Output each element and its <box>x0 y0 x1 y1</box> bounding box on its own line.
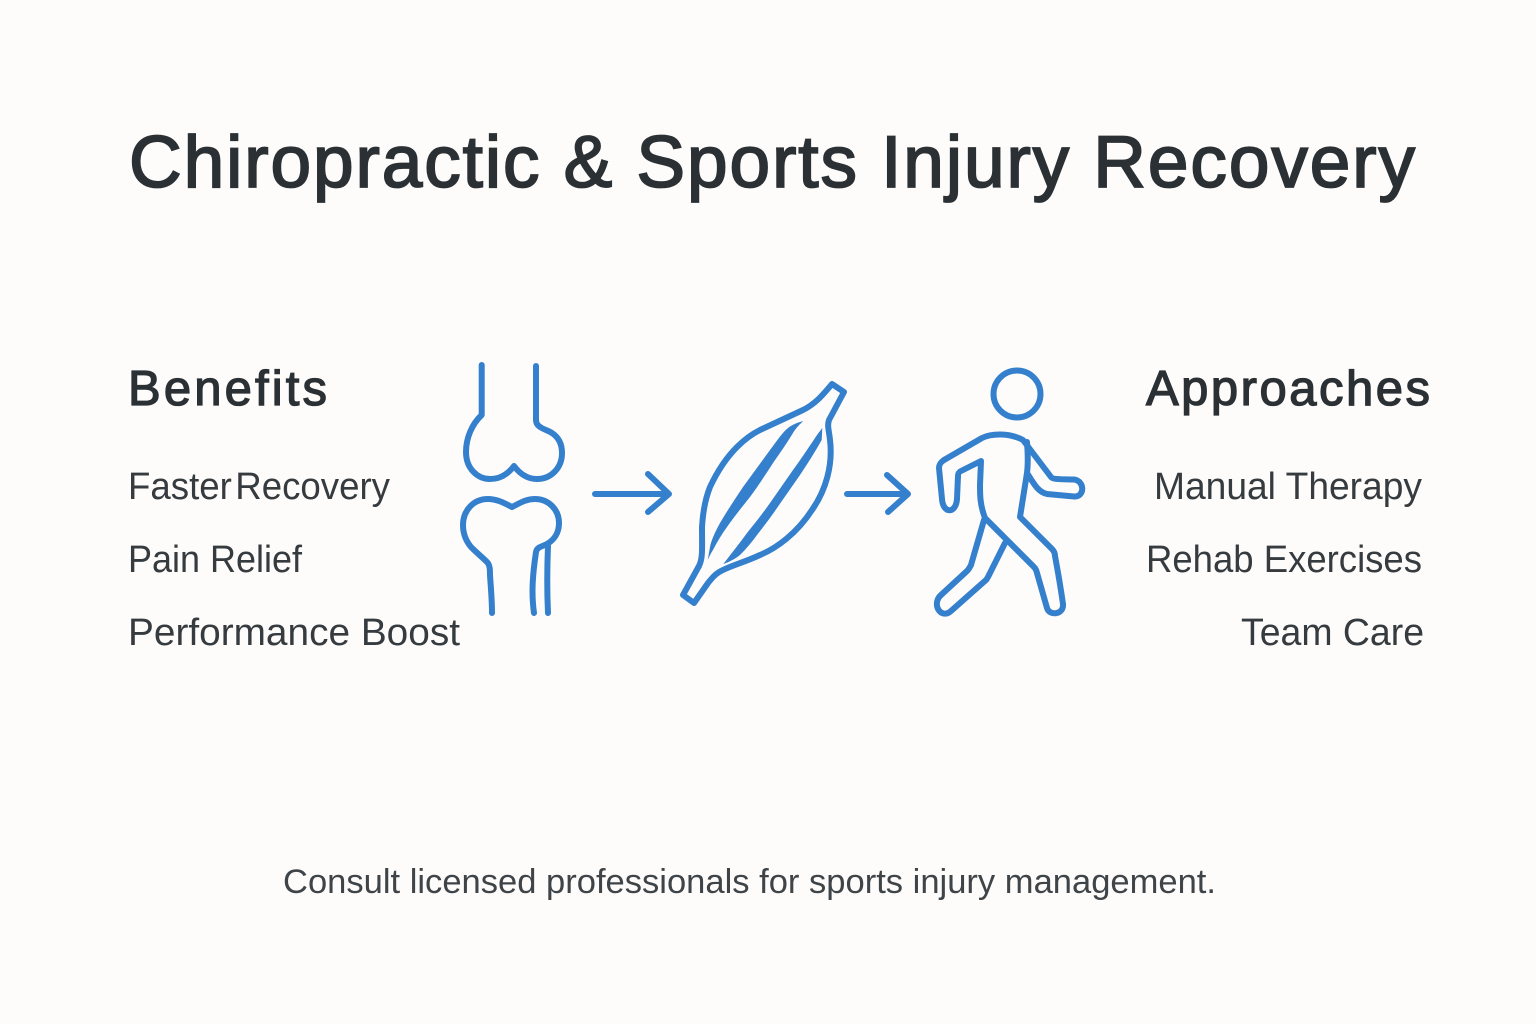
arrow: muscle to person <box>847 475 908 512</box>
heading: benefits: Benefits <box>128 362 327 416</box>
arrow: knee to muscle <box>595 474 669 512</box>
panel: approaches <box>1146 362 1430 654</box>
approach: team care: Team Care <box>1241 612 1424 654</box>
footer disclaimer: Consult licensed professionals for sports injury management. <box>283 863 1216 901</box>
panel: benefits <box>128 362 460 654</box>
icon: knee joint <box>463 365 562 613</box>
title: Chiropractic & Sports Injury Recovery <box>129 122 1416 203</box>
heading: approaches: Approaches <box>1146 362 1430 416</box>
approach: rehab exercises: Rehab Exercises <box>1146 539 1422 581</box>
benefit: performance boost: Performance Boost <box>128 612 460 654</box>
icon: walking person <box>937 370 1082 614</box>
icon: muscle <box>683 384 844 603</box>
approach: manual therapy: Manual Therapy <box>1154 466 1422 508</box>
benefit: faster recovery: Faster Recovery <box>128 466 390 508</box>
benefit: pain relief: Pain Relief <box>128 539 302 581</box>
